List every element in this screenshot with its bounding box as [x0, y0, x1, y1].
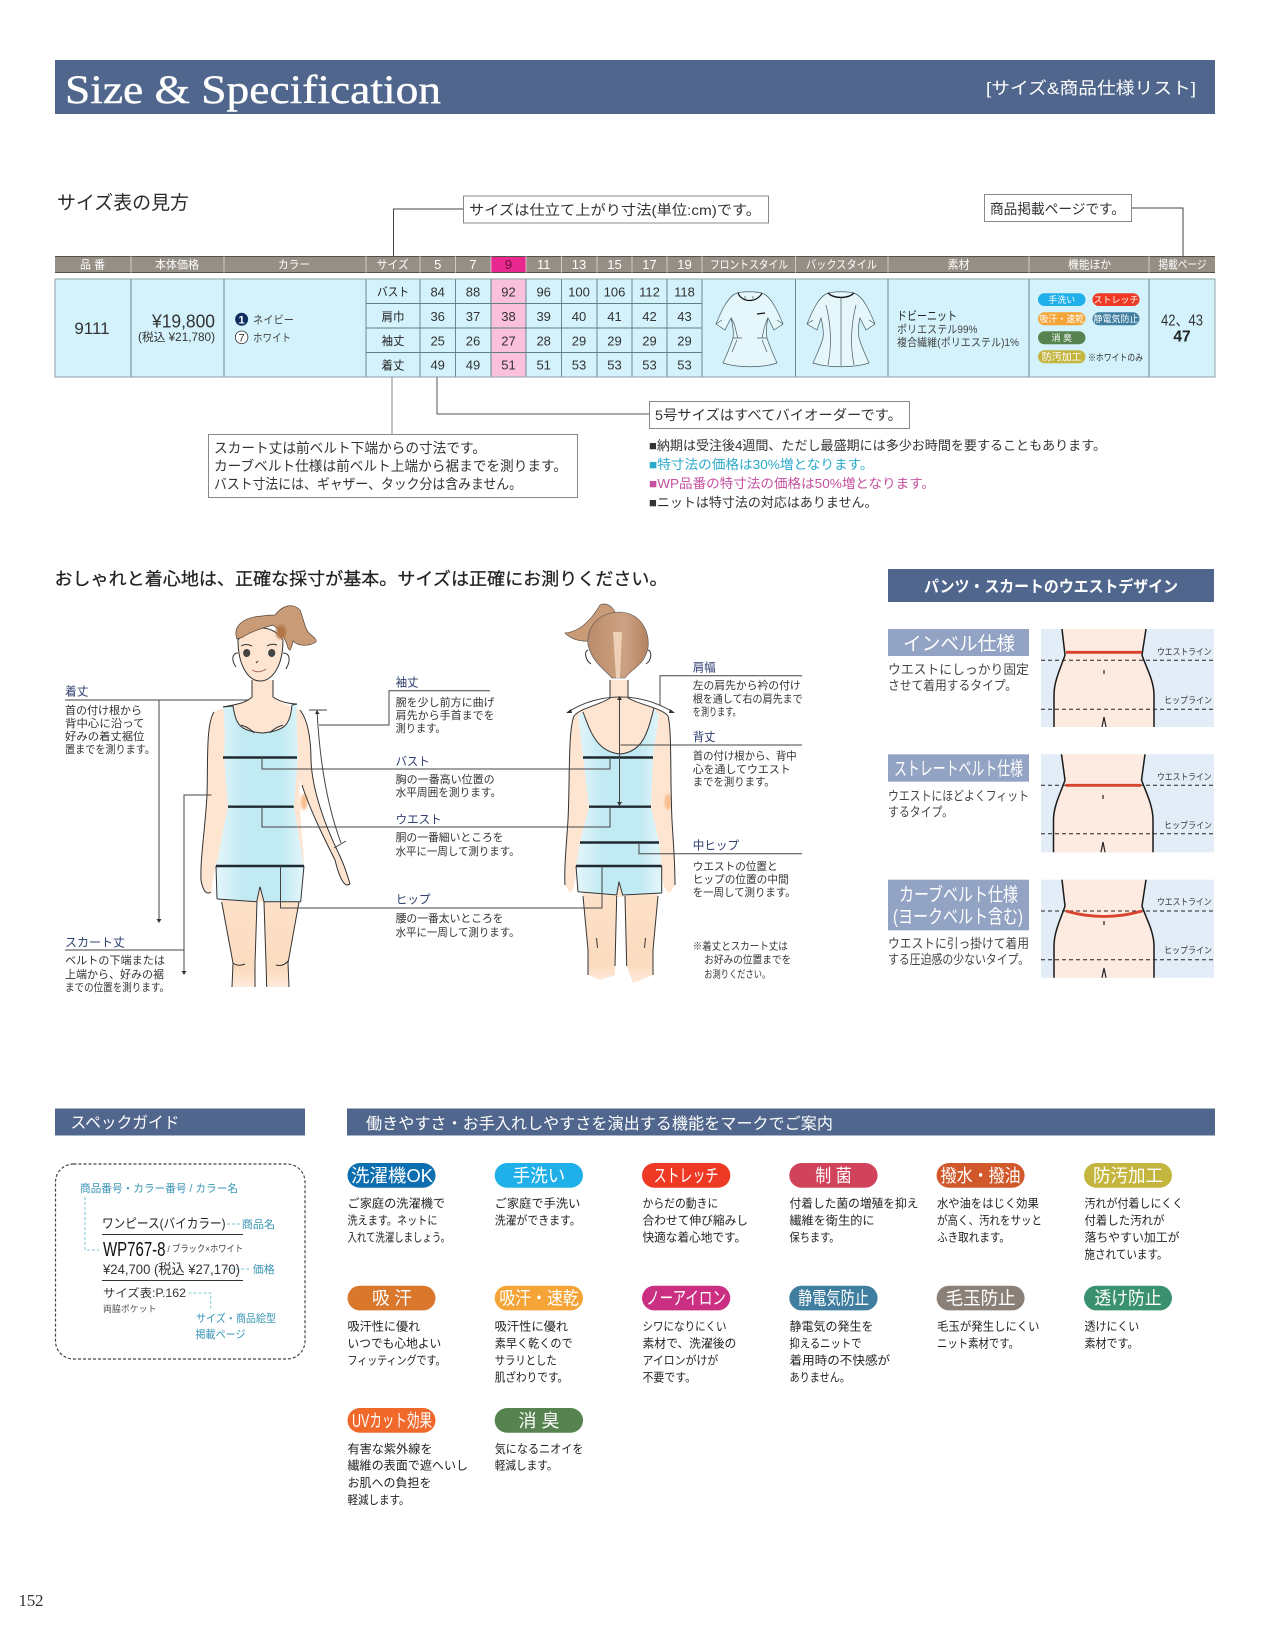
- size table header row: 9: [505, 257, 512, 272]
- label: middle hip: を一周して測ります。: [693, 885, 796, 899]
- mark: stain resistant: 落ちやすい加工が: [1084, 1230, 1180, 1244]
- size rows: 49: [466, 358, 480, 372]
- size rows: 51: [501, 358, 516, 372]
- label: skirt length: 上端から、好みの裾: [65, 967, 164, 981]
- diagram: straight belt waist: ウエストライン: [1157, 772, 1212, 782]
- size table header row: 機能ほか: [1068, 258, 1111, 272]
- panel: straight belt spec: ストレートベルト仕様: [894, 758, 1023, 780]
- mark: stretch: ストレッチ: [654, 1166, 718, 1186]
- label: garment length: 好みの着丈裾位: [65, 729, 144, 743]
- label: back length: までを測ります。: [693, 775, 775, 789]
- size table header row: バックスタイル: [806, 258, 877, 272]
- mark: no iron: シワになりにくい: [642, 1320, 726, 1334]
- panel: curved belt spec: する圧迫感の少ないタイプ。: [888, 952, 1029, 967]
- size table header row: 素材: [948, 258, 970, 272]
- mark: stain resistant: 施されています。: [1084, 1248, 1168, 1262]
- label: shoulder width: を測ります。: [693, 705, 741, 719]
- label: garment length: [65, 684, 155, 756]
- size rows: 112: [639, 284, 660, 300]
- mark: antistatic: 抑えるニットで: [790, 1336, 862, 1350]
- material: [897, 309, 1019, 349]
- size table header row: 品 番: [80, 258, 105, 272]
- panel: straight belt spec: するタイプ。: [888, 804, 953, 820]
- panel: in-belt spec: インベル仕様: [903, 633, 1015, 655]
- label: waist: 水平に一周して測ります。: [396, 844, 520, 858]
- illustration: back figure: [565, 604, 675, 983]
- label: waist: ウエスト: [396, 812, 442, 826]
- size rows: 40: [572, 309, 586, 324]
- heading banner: function marks: [347, 1108, 1215, 1136]
- item number: 9111: [74, 319, 110, 338]
- mark: antibacterial: 付着した菌の増殖を抑え: [790, 1196, 918, 1210]
- delivery and special size notes: ■特寸法の価格は30%増となります。: [649, 457, 874, 472]
- size rows: 53: [572, 358, 586, 372]
- garment: front style: [716, 292, 783, 367]
- panel: spec guide example: サイズ・商品絵型: [196, 1311, 276, 1325]
- diagram: in-belt waist: [1041, 629, 1214, 727]
- label: sleeve length: 袖丈: [396, 676, 419, 690]
- mark: no iron: アイロンがけが: [642, 1354, 718, 1368]
- size table header row: [55, 256, 1215, 273]
- mark: see-through prevention: 透けにくい: [1084, 1320, 1139, 1334]
- size rows: 106: [604, 284, 625, 300]
- colours: 7: [239, 332, 245, 344]
- page references: [1161, 312, 1203, 346]
- mark: antistatic: ありません。: [790, 1370, 850, 1384]
- heading banner: function marks: 働きやすさ・お手入れしやすさを演出する機能をマークでご案内: [366, 1115, 833, 1133]
- mark: deodorant: 気になるニオイを: [495, 1442, 584, 1456]
- mark: anti-pilling: 毛玉防止: [946, 1289, 1016, 1309]
- mark: sweat absorbent and quick dry: 吸汗・速乾: [499, 1289, 579, 1309]
- size rows: 28: [536, 334, 551, 348]
- callout: skirt length note: カーブベルト仕様は前ベルト上端から裾までを測ります。: [214, 458, 567, 474]
- size rows: 27: [501, 334, 516, 348]
- note: preferred position: お好みの位置までを: [704, 953, 791, 966]
- diagram: straight belt waist: [1041, 754, 1214, 852]
- material: ドビーニット: [897, 309, 957, 323]
- diagram: curved belt waist: [1041, 880, 1214, 978]
- label: bust: [396, 754, 501, 799]
- mark: stretch: 合わせて伸び縮みし: [642, 1214, 748, 1228]
- size rows: 25: [430, 334, 445, 348]
- label: bust: 水平周囲を測ります。: [396, 785, 501, 799]
- size rows: 袖丈: [382, 334, 404, 348]
- subtitle: size and product spec list: [サイズ&商品仕様リスト]: [986, 79, 1196, 98]
- delivery and special size notes: [649, 438, 1106, 510]
- label: hip: 腰の一番太いところを: [396, 912, 504, 925]
- callout: sizes are finished dimensions: サイズは仕立て上がり寸法(単位:cm)です。: [469, 202, 761, 218]
- callout: skirt length note: バスト寸法には、ギャザー、タック分は含みません。: [214, 476, 522, 492]
- mark: stain resistant: 付着した汚れが: [1084, 1214, 1165, 1228]
- mark: washing machine OK: [348, 1163, 450, 1244]
- mark: sweat absorbent: フィッティングです。: [348, 1354, 446, 1368]
- panel: spec guide example: ワンピース(バイカラー): [102, 1216, 226, 1231]
- size rows: 84: [430, 284, 445, 300]
- label: sleeve length: 腕を少し前方に曲げ: [396, 695, 495, 709]
- callout: product page: [984, 194, 1183, 256]
- mark: water and oil repellent: ふき取れます。: [937, 1230, 1010, 1244]
- size rows: 100: [568, 284, 590, 300]
- label: garment length: 置までを測ります。: [65, 742, 155, 756]
- size rows: 92: [501, 284, 516, 300]
- panel: spec guide example: / ブラック×ホワイト: [168, 1243, 243, 1255]
- function marks: 静電気防止: [1093, 313, 1139, 324]
- function marks: [1038, 293, 1143, 364]
- panel: in-belt spec: [888, 629, 1214, 727]
- mark: hand wash: [495, 1163, 583, 1228]
- material: 複合繊維(ポリエステル)1%: [897, 335, 1019, 349]
- panel: straight belt spec: ウエストにほどよくフィット: [888, 788, 1029, 804]
- mark: deodorant: 軽減します。: [495, 1458, 558, 1472]
- size rows: 29: [572, 334, 586, 348]
- mark: sweat absorbent and quick dry: 吸汗性に優れ: [495, 1320, 568, 1334]
- label: sleeve length: 測ります。: [396, 721, 446, 735]
- heading banner: waist design: [888, 569, 1214, 602]
- page references: 47: [1173, 328, 1191, 346]
- mark: anti-pilling: ニット素材です。: [937, 1336, 1019, 1350]
- diagram: curved belt waist: ヒップライン: [1164, 946, 1212, 956]
- label: garment length: 首の付け根から: [65, 703, 142, 717]
- size rows: [377, 284, 695, 372]
- mark: hand wash: 洗濯ができます。: [495, 1214, 581, 1228]
- mark: no iron: 素材で、洗濯後の: [642, 1336, 736, 1350]
- label: shoulder width: 肩幅: [693, 660, 716, 674]
- size rows: 96: [536, 284, 551, 300]
- callout: size 5 is by order: [437, 377, 910, 428]
- size rows: 29: [642, 334, 657, 348]
- label: middle hip: ウエストの位置と: [693, 860, 778, 873]
- size rows: 36: [430, 309, 445, 324]
- mark: antibacterial: 保ちます。: [790, 1230, 840, 1244]
- function marks: 吸汗・速乾: [1039, 313, 1084, 324]
- price: [138, 312, 215, 344]
- panel: curved belt spec: [888, 880, 1214, 978]
- mark: UV cut: [348, 1408, 468, 1507]
- mark: no iron: ノーアイロン: [646, 1289, 726, 1309]
- callout: sizes are finished dimensions: [394, 196, 768, 256]
- page references: 42、43: [1161, 312, 1203, 330]
- mark: see-through prevention: 透け防止: [1094, 1289, 1162, 1309]
- size table header row: サイズ: [377, 258, 409, 272]
- label: middle hip: 中ヒップ: [693, 838, 739, 852]
- mark: sweat absorbent and quick dry: 素早く乾くので: [495, 1336, 573, 1350]
- colours: [235, 313, 294, 344]
- panel: spec guide example: 掲載ページ: [196, 1327, 246, 1341]
- mark: anti-pilling: 毛玉が発生しにくい: [937, 1320, 1040, 1334]
- delivery and special size notes: ■ニットは特寸法の対応はありません。: [649, 495, 878, 510]
- title: Size & Specification: Size & Specification: [65, 67, 441, 112]
- label: garment length: 着丈: [65, 684, 88, 698]
- mark: hand wash: 手洗い: [513, 1166, 565, 1186]
- size table header row: 15: [607, 257, 622, 272]
- callout: size 5 is by order: 5号サイズはすべてバイオーダーです。: [655, 407, 902, 423]
- mark: stretch: からだの動きに: [642, 1196, 718, 1210]
- price: ¥19,800: [151, 312, 215, 332]
- mark: antibacterial: 繊維を衛生的に: [790, 1214, 874, 1228]
- size table body row: [55, 279, 1215, 377]
- size rows: 53: [607, 358, 622, 372]
- function marks: 手洗い: [1048, 294, 1075, 305]
- mark: washing machine OK: 入れて洗濯しましょう。: [348, 1230, 450, 1244]
- mark: UV cut: 繊維の表面で遮へいし: [348, 1458, 468, 1472]
- heading banner: spec guide: スペックガイド: [70, 1114, 180, 1132]
- panel: curved belt spec: カーブベルト仕様: [899, 883, 1018, 906]
- size rows: 49: [430, 358, 445, 372]
- size table header row: 7: [469, 257, 477, 272]
- mark: washing machine OK: 洗濯機OK: [351, 1166, 433, 1186]
- label: skirt length: [65, 936, 169, 994]
- mark: no iron: 不要です。: [642, 1370, 696, 1384]
- note: preferred position: [693, 940, 791, 980]
- mark: see-through prevention: [1084, 1286, 1172, 1350]
- panel: in-belt spec: させて着用するタイプ。: [888, 678, 1017, 693]
- size table header row: 5: [434, 257, 441, 272]
- label: hip: 水平に一周して測ります。: [396, 925, 520, 939]
- measurement lines: [65, 676, 802, 972]
- mark: see-through prevention: 素材です。: [1084, 1336, 1138, 1350]
- panel: spec guide example: ¥24,700 (税込 ¥27,170): [102, 1261, 240, 1277]
- size rows: バスト: [377, 285, 409, 299]
- mark: sweat absorbent and quick dry: 肌ざわりです。: [495, 1370, 568, 1384]
- mark: sweat absorbent: [348, 1286, 446, 1368]
- size rows: 88: [466, 284, 480, 300]
- panel: in-belt spec: ウエストにしっかり固定: [888, 662, 1029, 677]
- label: shoulder width: [693, 660, 803, 719]
- label: back length: [693, 730, 797, 789]
- label: garment length: 背中心に沿って: [65, 716, 144, 730]
- material: ポリエステル99%: [897, 323, 978, 336]
- panel: straight belt spec: [888, 754, 1214, 852]
- size rows: 29: [607, 334, 622, 348]
- label: hip: ヒップ: [396, 892, 431, 906]
- label: shoulder width: 左の肩先から衿の付け: [693, 679, 801, 692]
- panel: spec guide example: 商品番号・カラー番号 / カラー名: [80, 1181, 238, 1195]
- label: bust: バスト: [396, 754, 430, 768]
- heading banner: spec guide: [55, 1108, 305, 1136]
- mark: water and oil repellent: 撥水・撥油: [941, 1166, 1021, 1186]
- heading: how to read size table: サイズ表の見方: [57, 192, 189, 214]
- mark: sweat absorbent: 吸 汗: [372, 1289, 412, 1309]
- label: middle hip: ヒップの位置の中間: [693, 873, 789, 886]
- label: sleeve length: [396, 676, 495, 735]
- panel: spec guide example: 商品名: [242, 1217, 275, 1231]
- size table header row: 本体価格: [155, 258, 199, 272]
- size table header row: 11: [537, 257, 550, 272]
- diagram: straight belt waist: ヒップライン: [1164, 820, 1212, 830]
- panel: spec guide example: [56, 1164, 305, 1359]
- mark: water and oil repellent: が高く、汚れをサッと: [937, 1214, 1042, 1228]
- size rows: 41: [607, 309, 622, 324]
- panel: curved belt spec: (ヨークベルト含む): [893, 906, 1023, 928]
- label: waist: [396, 812, 520, 858]
- mark: stretch: [642, 1163, 748, 1244]
- mark: antistatic: 静電気防止: [798, 1289, 869, 1309]
- size rows: 42: [642, 309, 657, 324]
- callout: product page: 商品掲載ページです。: [990, 201, 1125, 217]
- panel: curved belt spec: ウエストに引っ掛けて着用: [888, 936, 1029, 951]
- mark: sweat absorbent: いつでも心地よい: [348, 1336, 441, 1350]
- size rows: 43: [677, 309, 692, 324]
- size rows: 39: [536, 309, 551, 324]
- mark: antibacterial: [789, 1163, 918, 1244]
- size table header row: 19: [677, 257, 692, 272]
- delivery and special size notes: ■納期は受注後4週間、ただし最盛期には多少お時間を要することもあります。: [649, 438, 1106, 453]
- function marks: 消 臭: [1051, 332, 1072, 343]
- diagram: in-belt waist: ヒップライン: [1164, 696, 1212, 706]
- page number: 152: [18, 1591, 44, 1610]
- colours: ネイビー: [253, 314, 294, 326]
- size rows: 肩巾: [382, 310, 404, 324]
- size rows: 53: [677, 358, 692, 372]
- label: skirt length: スカート丈: [65, 936, 125, 950]
- mark: UV cut: UVカット効果: [352, 1411, 432, 1431]
- label: waist: 胴の一番細いところを: [396, 830, 504, 844]
- mark: no iron: [642, 1286, 736, 1384]
- label: sleeve length: 肩先から手首までを: [396, 708, 495, 722]
- diagram: in-belt waist: ウエストライン: [1157, 647, 1212, 657]
- label: bust: 胸の一番高い位置の: [396, 772, 495, 786]
- note: preferred position: お測りください。: [704, 968, 770, 980]
- size table header row: フロントスタイル: [710, 258, 788, 272]
- size rows: 着丈: [382, 358, 404, 372]
- function marks: 防汚加工: [1042, 350, 1082, 364]
- mark: water and oil repellent: [937, 1163, 1042, 1244]
- mark: hand wash: ご家庭で手洗い: [495, 1196, 580, 1210]
- label: back length: 首の付け根から、背中: [693, 749, 797, 763]
- label: hip: [396, 892, 520, 939]
- mark: sweat absorbent: 吸汗性に優れ: [348, 1320, 420, 1334]
- label: middle hip: [693, 838, 796, 899]
- mark: stain resistant: 防汚加工: [1093, 1166, 1163, 1186]
- heading: measure accurately: おしゃれと着心地は、正確な採寸が基本。サイズは正確にお測りください。: [54, 569, 668, 589]
- mark: antistatic: [789, 1286, 890, 1384]
- callout: skirt length note: [208, 377, 578, 498]
- size rows: 29: [677, 334, 692, 348]
- colours: 1: [239, 314, 245, 326]
- mark: sweat absorbent and quick dry: [495, 1286, 583, 1384]
- size table header row: 掲載ページ: [1158, 258, 1206, 272]
- label: skirt length: までの位置を測ります。: [65, 980, 169, 994]
- mark: water and oil repellent: 水や油をはじく効果: [937, 1196, 1039, 1210]
- panel: spec guide example: 価格: [253, 1262, 275, 1276]
- function marks: ストレッチ: [1093, 295, 1139, 305]
- size rows: 53: [642, 358, 657, 372]
- mark: stretch: 快適な着心地です。: [642, 1230, 746, 1244]
- mark: washing machine OK: 洗えます。ネットに: [348, 1214, 438, 1228]
- panel: spec guide example: サイズ表:P.162: [103, 1286, 186, 1300]
- size rows: 118: [674, 284, 695, 300]
- mark: UV cut: 有害な紫外線を: [348, 1442, 432, 1456]
- size rows: 51: [536, 358, 551, 372]
- mark: washing machine OK: ご家庭の洗濯機で: [348, 1196, 445, 1210]
- size table header row: カラー: [278, 258, 310, 272]
- mark: UV cut: お肌への負担を: [348, 1476, 432, 1490]
- mark: anti-pilling: [937, 1286, 1040, 1350]
- panel: spec guide example: 両脇ポケット: [103, 1304, 156, 1314]
- panel: spec guide example: WP767-8: [103, 1239, 166, 1261]
- mark: UV cut: 軽減します。: [348, 1493, 410, 1507]
- mark: deodorant: [495, 1408, 584, 1472]
- heading banner: waist design: パンツ・スカートのウエストデザイン: [924, 577, 1178, 596]
- label: back length: 背丈: [693, 730, 716, 744]
- mark: deodorant: 消 臭: [518, 1411, 560, 1431]
- mark: antistatic: 着用時の不快感が: [790, 1354, 890, 1368]
- mark: antibacterial: 制 菌: [815, 1166, 852, 1186]
- illustration: front figure: [201, 606, 350, 987]
- size table header row: 17: [642, 257, 657, 272]
- label: skirt length: ベルトの下端または: [65, 954, 165, 967]
- note: preferred position: ※着丈とスカート丈は: [693, 940, 788, 952]
- garment: back style: [807, 292, 875, 367]
- diagram: curved belt waist: ウエストライン: [1157, 897, 1212, 907]
- size rows: 26: [466, 334, 480, 348]
- delivery and special size notes: ■WP品番の特寸法の価格は50%増となります。: [649, 476, 935, 491]
- colours: ホワイト: [253, 332, 291, 344]
- function marks: ※ホワイトのみ: [1088, 353, 1143, 364]
- mark: stain resistant: 汚れが付着しにくく: [1084, 1196, 1183, 1210]
- mark: antistatic: 静電気の発生を: [790, 1320, 874, 1334]
- price: (税込 ¥21,780): [138, 330, 215, 344]
- title banner: [55, 60, 1215, 114]
- mark: sweat absorbent and quick dry: サラリとした: [495, 1354, 557, 1368]
- mark: stain resistant: [1084, 1163, 1183, 1262]
- size table header row: 13: [572, 257, 586, 272]
- label: back length: 心を通してウエスト: [693, 763, 791, 776]
- size rows: 37: [466, 309, 480, 324]
- callout: skirt length note: スカート丈は前ベルト下端からの寸法です。: [214, 440, 486, 456]
- label: shoulder width: 根を通して右の肩先まで: [693, 692, 803, 706]
- size rows: 38: [501, 309, 516, 324]
- arrowheads: [156, 696, 675, 975]
